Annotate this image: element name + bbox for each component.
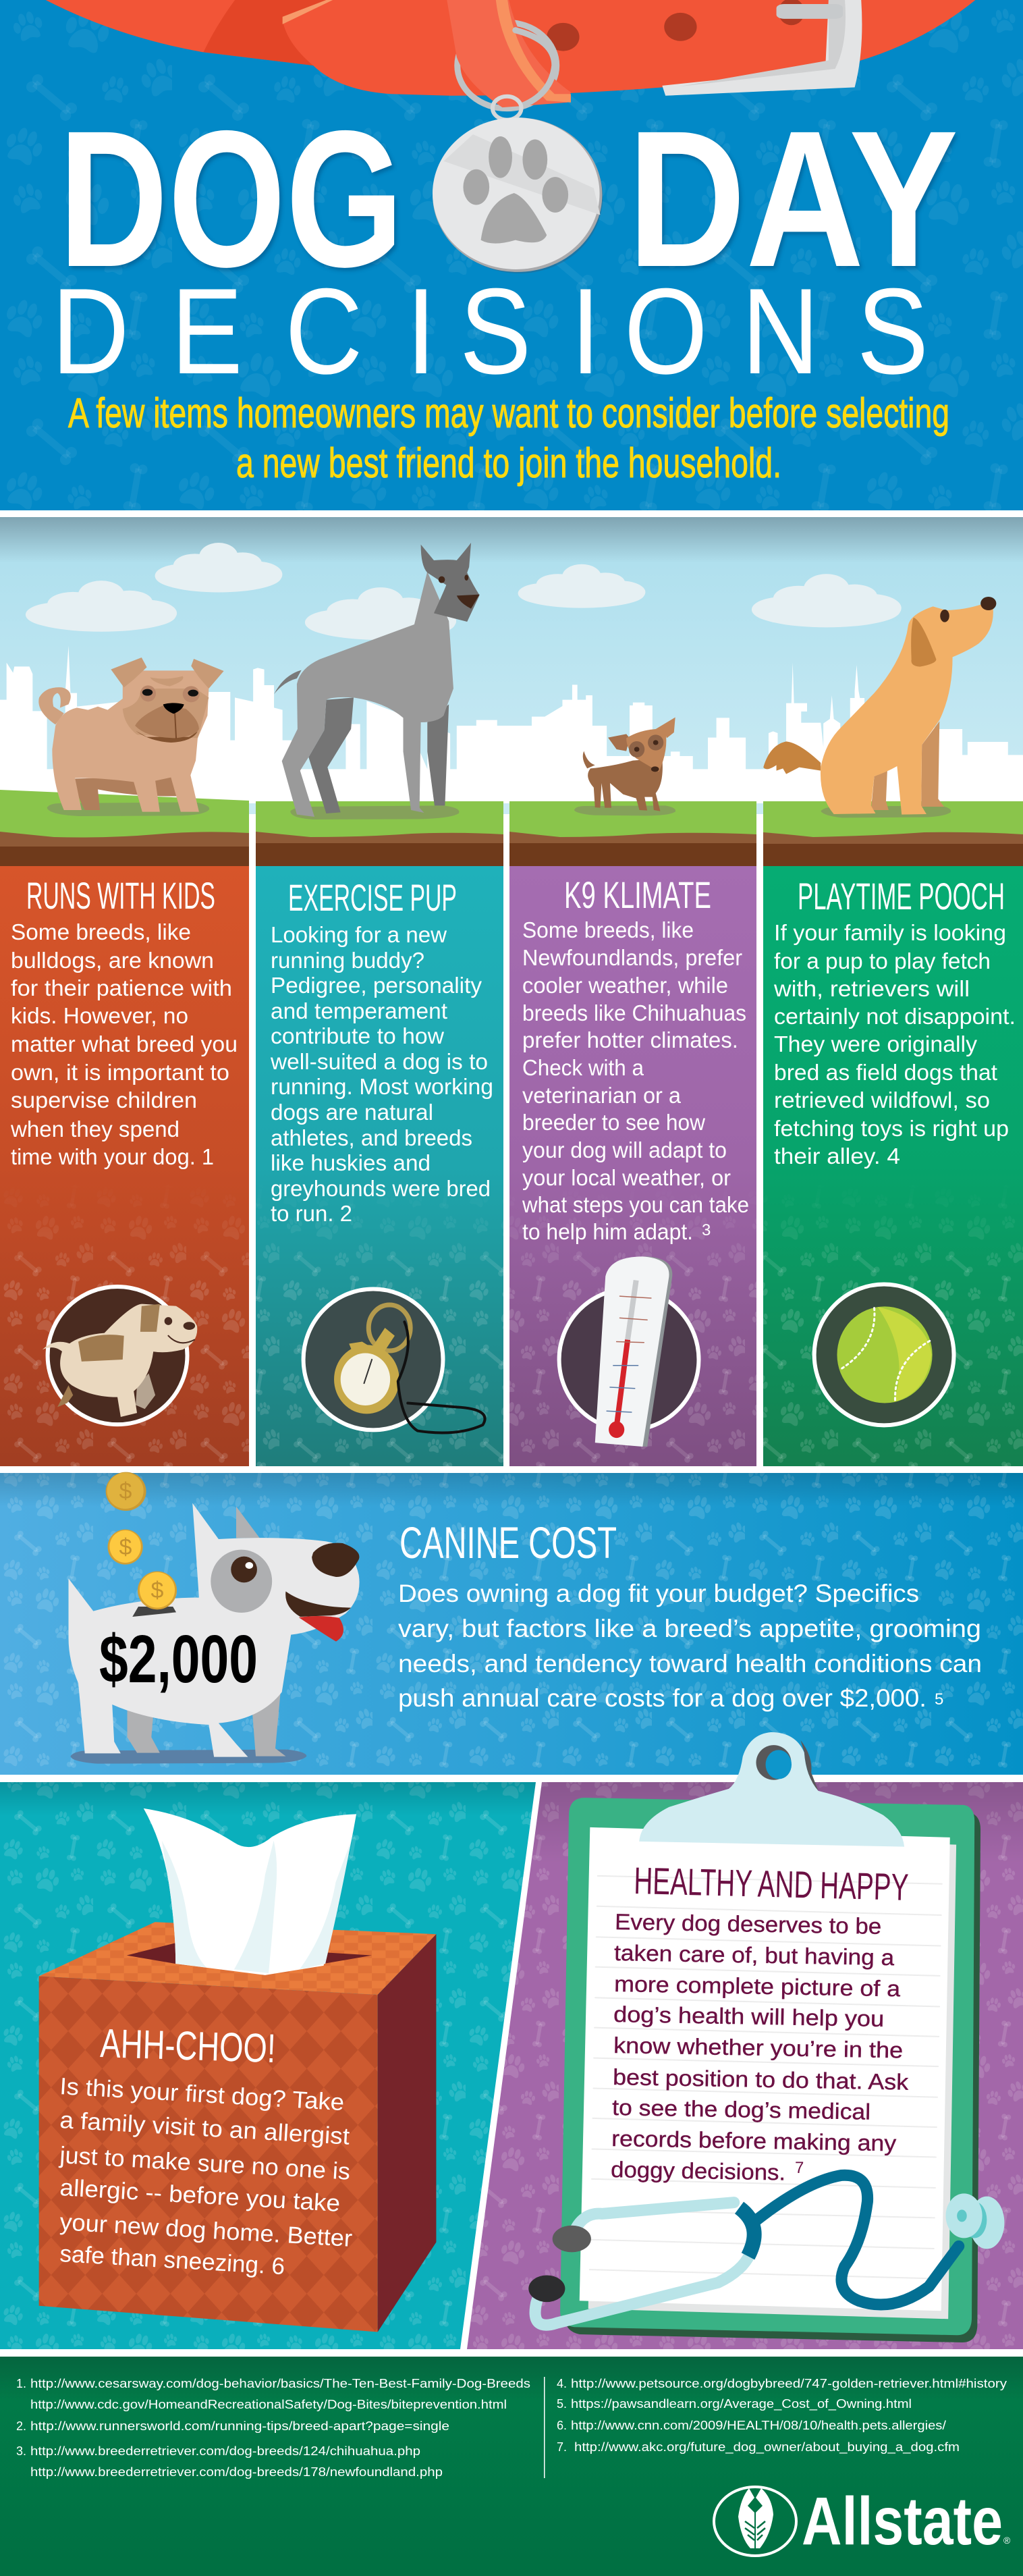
body text: contribute to how	[271, 1023, 444, 1048]
body text: allergic -- before you take	[59, 2174, 341, 2217]
body text: prefer hotter climates.	[522, 1027, 738, 1052]
body text: time with your dog. 1	[11, 1144, 214, 1169]
clouds	[26, 543, 902, 640]
body text: needs, and tendency toward health conditions can	[398, 1650, 982, 1678]
heading: CANINE COST	[399, 1518, 617, 1567]
body text: 3	[702, 1221, 711, 1239]
body text: safe than sneezing. 6	[59, 2240, 285, 2280]
city skyline	[0, 646, 1023, 803]
label: $2,000: $2,000	[99, 1621, 258, 1697]
panel: runs with kids	[0, 866, 249, 1466]
subtitle	[68, 390, 949, 487]
body text: running buddy?	[271, 948, 424, 973]
collar	[46, 0, 975, 109]
body text	[773, 920, 1016, 1169]
body text: and temperament	[271, 998, 447, 1023]
title: DOG: DOG	[59, 90, 404, 308]
title: DECISIONS: DECISIONS	[52, 264, 929, 400]
panel: playtime pooch	[763, 866, 1023, 1466]
body text: Is this your first dog? Take	[59, 2073, 345, 2116]
body text: dog’s health will help you	[613, 2002, 884, 2031]
body text: If your family is looking	[774, 920, 1006, 945]
sources: right column: https://pawsandlearn.org/Average_Cost_of_Owning.html	[571, 2397, 912, 2411]
icon: paw tag	[433, 97, 603, 273]
body text: supervise children	[11, 1088, 197, 1112]
body text: to run. 2	[271, 1201, 352, 1226]
body text: push annual care costs for a dog over $2,000.	[398, 1684, 927, 1712]
body text: when they spend	[10, 1117, 179, 1142]
dog: bulldog	[38, 658, 224, 816]
body text	[270, 922, 493, 1226]
sources: right column: 7.	[557, 2440, 567, 2454]
logo: Allstate hands	[714, 2487, 796, 2556]
body text: fetching toys is right up	[774, 1116, 1009, 1141]
panel: canine cost	[0, 1466, 1023, 1775]
icon: stethoscope	[528, 2175, 1004, 2325]
body text	[10, 919, 238, 1169]
icon: clipboard	[560, 1732, 980, 2342]
sources: right column: 6.	[557, 2419, 567, 2432]
ground	[0, 790, 1023, 866]
heading: K9 KLIMATE	[564, 874, 711, 916]
body text	[59, 2073, 353, 2280]
body text: certainly not disappoint.	[774, 1004, 1016, 1029]
sources: left column: http://www.cdc.gov/HomeandRecreationalSafety/Dog-Bites/biteprevention.html	[30, 2398, 507, 2411]
icon: tennis ball	[814, 1284, 954, 1425]
sources: left column: http://www.runnersworld.com/running-tips/breed-apart?page=single	[30, 2419, 449, 2433]
sources: left column: http://www.cesarsway.com/dog-behavior/basics/The-Ten-Best-Family-Dog-Breeds	[30, 2377, 530, 2390]
heading: HEALTHY AND HAPPY	[634, 1859, 909, 1908]
body text: more complete picture of a	[614, 1971, 901, 2001]
title: DAY: DAY	[628, 90, 958, 308]
sources: right column: 5.	[557, 2397, 567, 2411]
sources: right column: http://www.petsource.org/dogbybreed/747-golden-retriever.html#history	[571, 2377, 1007, 2390]
body text: doggy decisions.	[611, 2157, 785, 2185]
body text	[611, 1909, 909, 2185]
subtitle: a new best friend to join the household.	[236, 440, 781, 487]
body text: Some breeds, like	[11, 919, 191, 944]
icon: falling coins: $	[119, 1534, 132, 1560]
body text: breeder to see how	[522, 1110, 705, 1135]
body text: vary, but factors like a breed’s appetite, grooming	[398, 1615, 981, 1642]
sources: right column: http://www.akc.org/future_dog_owner/about_buying_a_dog.cfm	[574, 2440, 960, 2454]
icon: stopwatch	[304, 1289, 485, 1432]
body text: their alley. 4	[774, 1144, 900, 1169]
body text: for a pup to play fetch	[774, 948, 991, 973]
sources: left column	[16, 2377, 530, 2479]
panel: exercise pup	[256, 866, 503, 1466]
body text: breeds like Chihuahuas	[522, 1000, 746, 1025]
body text: veterinarian or a	[522, 1083, 682, 1108]
sources: right column: 4.	[557, 2377, 567, 2390]
body text: dogs are natural	[271, 1100, 433, 1125]
body text: greyhounds were bred	[271, 1176, 491, 1201]
body text	[398, 1580, 982, 1712]
body text: athletes, and breeds	[271, 1125, 472, 1150]
body text: what steps you can take	[522, 1192, 749, 1217]
body text: just to make sure no one is	[59, 2142, 351, 2185]
body text: best position to do that. Ask	[613, 2064, 909, 2095]
panel: healthy and happy	[467, 1732, 1023, 2349]
body text: own, it is important to	[11, 1060, 229, 1085]
body text: cooler weather, while	[522, 973, 728, 998]
panel: footer	[0, 2357, 1023, 2576]
panel: header	[0, 0, 1023, 510]
body text: Pedigree, personality	[271, 973, 482, 998]
sources: left column: http://www.breederretriever.com/dog-breeds/124/chihuahua.php	[30, 2444, 420, 2458]
body text: retrieved wildfowl, so	[774, 1088, 990, 1112]
logo: registered mark: ®	[1003, 2535, 1011, 2546]
body text: to help him adapt.	[522, 1219, 693, 1244]
body text: 5	[935, 1690, 943, 1709]
sources: left column: 1.	[16, 2377, 26, 2390]
body text: Does owning a dog fit your budget? Specifics	[398, 1580, 919, 1607]
body text: 7	[795, 2159, 804, 2177]
body text: with, retrievers will	[773, 976, 970, 1001]
heading: AHH-CHOO!	[100, 2020, 277, 2071]
body text: for their patience with	[11, 975, 232, 1000]
icon: running puppy	[43, 1287, 197, 1424]
dog: chihuahua	[574, 718, 675, 815]
panel: dog illustration row	[0, 510, 1023, 866]
icon: tissue box	[39, 1808, 436, 2332]
sources: left column: http://www.breederretriever.com/dog-breeds/178/newfoundland.php	[30, 2465, 443, 2479]
dog: great dane	[274, 543, 480, 820]
heading: EXERCISE PUP	[288, 876, 457, 919]
body text: Some breeds, like	[522, 917, 694, 942]
body text: bred as field dogs that	[774, 1060, 997, 1085]
body text	[522, 917, 749, 1244]
body text: matter what breed you	[11, 1031, 238, 1056]
body text: Check with a	[522, 1055, 644, 1080]
body text: Every dog deserves to be	[615, 1909, 881, 1939]
body text: bulldogs, are known	[11, 948, 214, 973]
body text: a family visit to an allergist	[59, 2107, 350, 2150]
body text: Looking for a new	[271, 922, 447, 947]
body text: taken care of, but having a	[614, 1940, 895, 1970]
sources: right column	[557, 2377, 1007, 2454]
body text: They were originally	[774, 1031, 977, 1056]
heading: RUNS WITH KIDS	[26, 874, 215, 917]
body text: running. Most working	[271, 1074, 493, 1099]
body text: to see the dog’s medical	[612, 2095, 870, 2124]
body text: kids. However, no	[11, 1003, 188, 1028]
body text: your new dog home. Better	[59, 2209, 353, 2252]
icon: falling coins: $	[119, 1478, 132, 1504]
dog: retriever	[763, 597, 996, 817]
body text: records before making any	[611, 2126, 897, 2155]
sources: left column: 3.	[16, 2444, 26, 2458]
body text: know whether you’re in the	[613, 2033, 903, 2062]
icon: falling coins: $	[151, 1578, 164, 1603]
panel: ahh-choo	[0, 1775, 1023, 2357]
panel: k9 klimate	[509, 866, 756, 1466]
icon: piggy-bank dog	[69, 1503, 360, 1764]
body text: your dog will adapt to	[522, 1137, 727, 1162]
sources: right column: http://www.cnn.com/2009/HEALTH/08/10/health.pets.allergies/	[571, 2419, 946, 2432]
body text: Newfoundlands, prefer	[522, 945, 742, 970]
body text: your local weather, or	[522, 1165, 731, 1190]
body text: well-suited a dog is to	[270, 1049, 488, 1074]
sources: left column: 2.	[16, 2419, 26, 2433]
body text: like huskies and	[271, 1150, 431, 1175]
icon: thermometer	[559, 1256, 698, 1447]
icon: falling coins	[106, 1472, 177, 1609]
